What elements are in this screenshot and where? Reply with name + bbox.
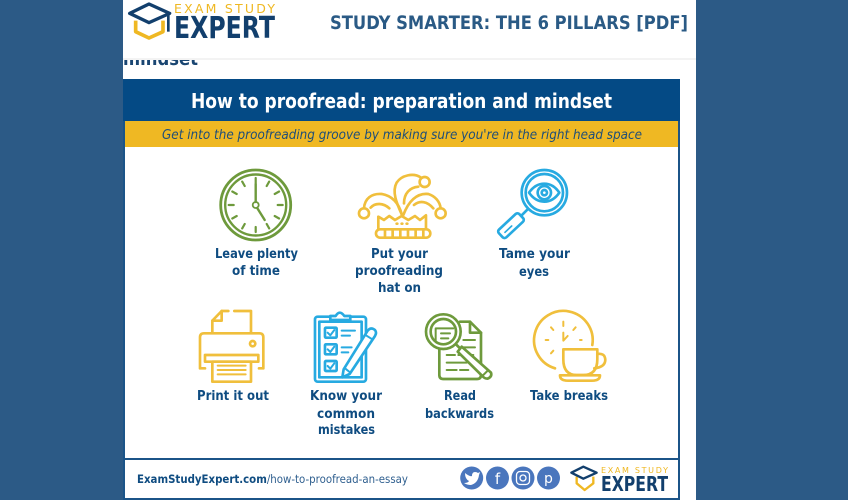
footer divider <box>125 458 678 460</box>
icon: clock and coffee cup <box>534 311 605 381</box>
footer logo wordmark bottom: EXPERT <box>601 472 668 496</box>
label: know your common mistakes: Know your <box>310 389 383 404</box>
subtitle band <box>125 121 678 147</box>
panel frame <box>124 80 679 499</box>
logo wordmark top: EXAM STUDY <box>174 1 275 16</box>
icon: jester hat <box>359 175 446 238</box>
footer url: ExamStudyExpert.com/how-to-proofread-an-essay <box>137 472 408 486</box>
panel title band <box>123 79 680 121</box>
label: leave plenty of time: Leave plenty <box>215 247 298 262</box>
icon: instagram <box>512 466 534 490</box>
icon: facebook: f <box>495 470 501 488</box>
label line two: backwards <box>425 407 494 422</box>
icon: printer <box>200 311 263 382</box>
infographic panel <box>123 79 680 499</box>
label line two: of time <box>232 264 280 279</box>
icon: clipboard checklist <box>315 313 376 382</box>
icon: document with magnifier <box>426 314 491 379</box>
icon: twitter <box>460 466 483 490</box>
label line three: mistakes <box>318 423 375 438</box>
label line two: proofreading <box>355 264 443 279</box>
label line three: hat on <box>378 281 421 296</box>
logo icon: graduation cap <box>130 4 170 38</box>
header title: STUDY SMARTER: THE 6 PILLARS [PDF] <box>330 12 688 34</box>
social icons <box>460 466 560 490</box>
clipped heading fragment: mindset <box>123 48 198 70</box>
footer logo icon <box>571 467 597 490</box>
icon: magnifier with eye <box>497 170 567 239</box>
site logo <box>130 1 275 46</box>
white article column <box>123 0 696 500</box>
subtitle: Get into the proofreading groove by making sure you're in the right head space <box>162 127 642 143</box>
label: tame your eyes: Tame your <box>499 247 571 262</box>
label line two: common <box>317 407 375 422</box>
icon: pinterest: p <box>544 471 553 487</box>
panel title: How to proofread: preparation and mindset <box>191 89 612 113</box>
footer logo wordmark top: EXAM STUDY <box>601 466 668 475</box>
icon: clock <box>221 170 291 240</box>
label: print it out: Print it out <box>197 389 269 404</box>
label: read backwards: Read <box>444 389 476 404</box>
site header bar <box>123 0 696 60</box>
label: put your proofreading hat on: Put your <box>371 247 429 262</box>
footer logo <box>571 466 668 496</box>
label: take breaks: Take breaks <box>530 389 608 404</box>
logo wordmark bottom: EXPERT <box>174 11 275 46</box>
label line two: eyes <box>519 265 549 280</box>
